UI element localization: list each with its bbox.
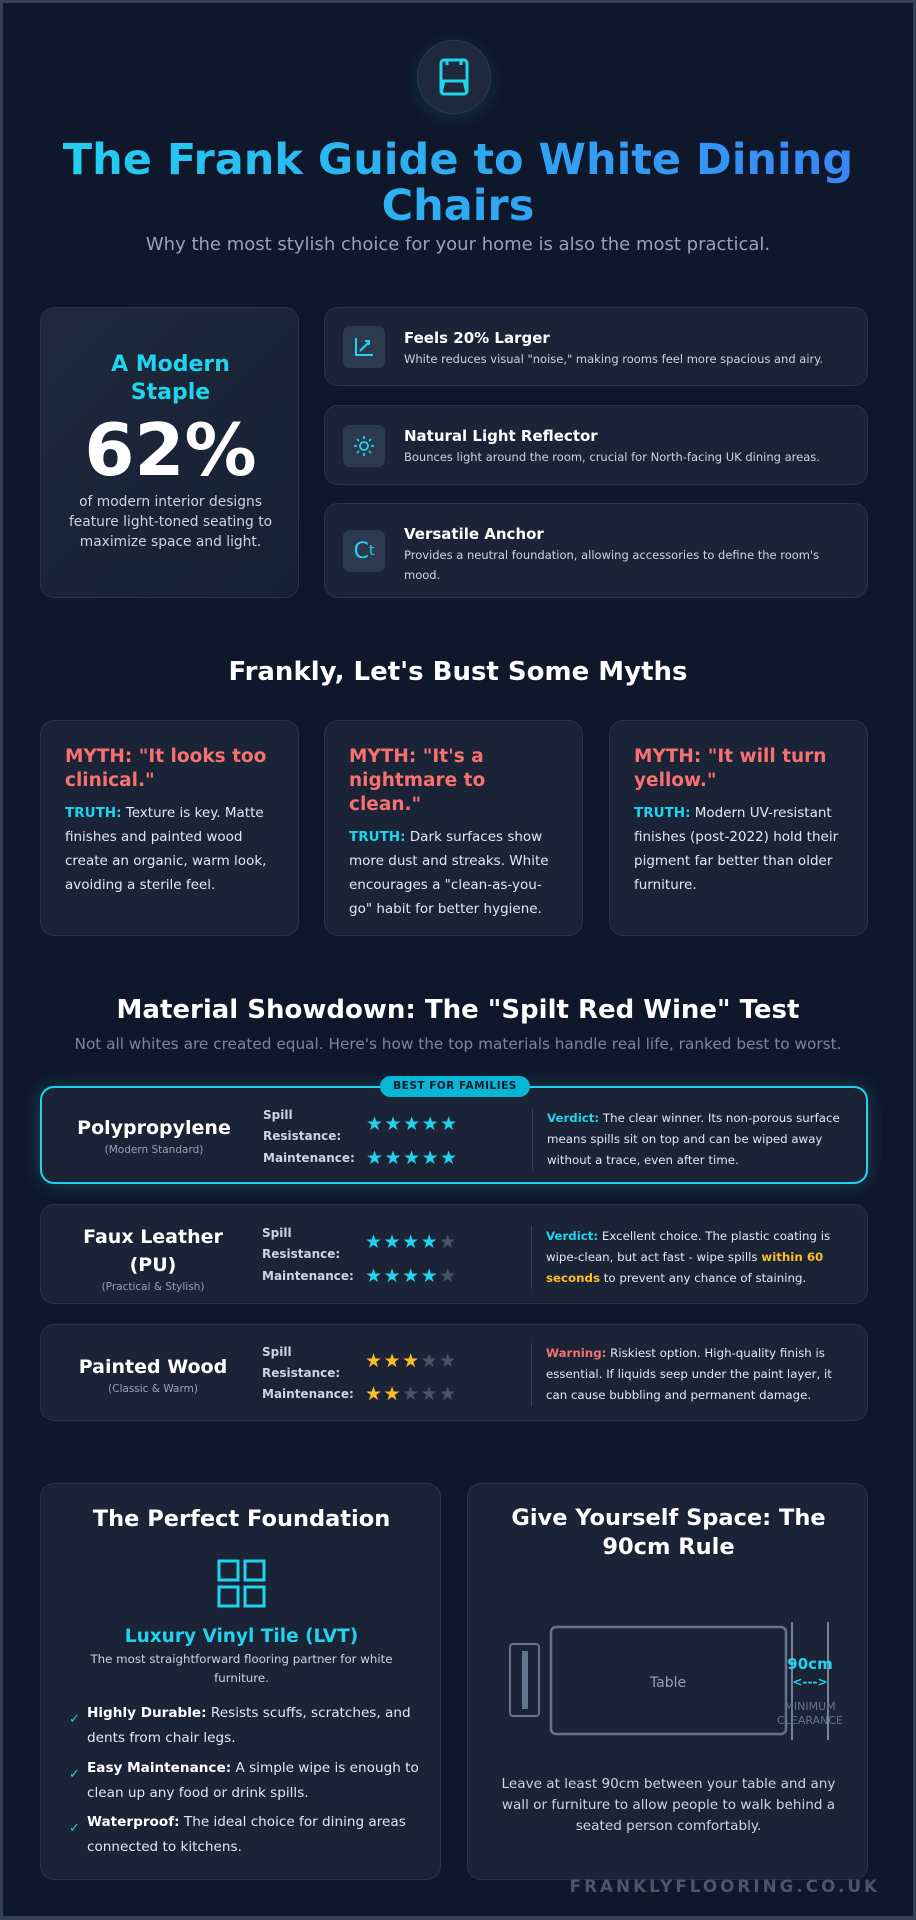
- panel: feels larger: [324, 307, 868, 386]
- heading: Give Yourself Space: The 90cm Rule: [511, 1505, 826, 1560]
- diagram: Table: [649, 1675, 686, 1691]
- stat heading: A Modern: [111, 352, 230, 377]
- subtitle: Why the most stylish choice for your home is also the most practical.: [146, 234, 770, 255]
- panel: polypropylene: Resistance:: [263, 1129, 341, 1143]
- panel: perfect foundation: Easy Maintenance: A simple wipe is enough to clean up any food or drink spills.: [87, 1760, 419, 1801]
- panel: painted wood: (Classic & Warm): [108, 1383, 198, 1395]
- panel: myth clean: TRUTH: Dark surfaces show more dust and streaks. White encourages a "clean-as-you-go" habit for better hygiene.: [349, 829, 549, 917]
- panel: faux leather: Maintenance:: [262, 1269, 354, 1283]
- icon: sun: [343, 425, 385, 467]
- panel: faux leather: Faux Leather: [83, 1226, 223, 1248]
- list: Highly Durable: Resists scuffs, scratches, and dents from chair legs.: [87, 1705, 411, 1746]
- panel: light reflector: Bounces light around the room, crucial for North-facing UK dining areas.: [404, 450, 820, 464]
- panel: feels larger: Feels 20% Larger: [404, 329, 550, 347]
- panel: perfect foundation: ✓: [69, 1712, 80, 1727]
- diagram: [509, 1622, 843, 1740]
- heading: material showdown: Material Showdown: The "Spilt Red Wine" Test: [117, 995, 799, 1025]
- title: [20, 137, 896, 229]
- warning: Warning: Riskiest option. High-quality finish is essential. If liquids seep under the paint layer, it can cause bubbling and permanent damage.: [546, 1346, 832, 1402]
- panel: faux leather: (PU): [130, 1254, 176, 1276]
- heading: The Perfect Foundation: [93, 1506, 390, 1532]
- panel: polypropylene: Maintenance:: [263, 1151, 355, 1165]
- title: The Frank Guide to White Dining: [63, 135, 853, 185]
- panel: faux leather: (Practical & Stylish): [102, 1281, 204, 1293]
- diagram: <--->: [792, 1675, 828, 1689]
- panel: polypropylene: (Modern Standard): [105, 1144, 203, 1156]
- badge: BEST FOR FAMILIES: [393, 1080, 517, 1092]
- stat heading: [111, 352, 230, 405]
- footer brand: FRANKLYFLOORING.CO.UK: [570, 1876, 880, 1896]
- panel: polypropylene: Spill: [263, 1108, 293, 1122]
- icon: tiles: [218, 1560, 266, 1608]
- diagram: 90cm: [787, 1655, 833, 1673]
- panel: 90cm rule: [467, 1483, 868, 1880]
- subheading: Not all whites are created equal. Here's how the top materials handle real life, ranked best to worst.: [74, 1035, 842, 1053]
- panel: faux leather: [40, 1204, 868, 1304]
- panel: stat 62%: [40, 307, 299, 598]
- verdict: Verdict: The clear winner. Its non-porous surface means spills sit on top and can be wiped away without a trace, even after time.: [547, 1111, 840, 1167]
- panel: perfect foundation: ✓: [69, 1821, 80, 1836]
- stat heading: Staple: [131, 380, 210, 405]
- panel: faux leather: ★★★★★: [365, 1265, 458, 1287]
- panel: painted wood: Maintenance:: [262, 1387, 354, 1401]
- panel: versatile anchor: Provides a neutral foundation, allowing accessories to define the room's mood.: [404, 548, 819, 582]
- panel: myth clinical: TRUTH: Texture is key. Matte finishes and painted wood create an organic, warm look, avoiding a sterile feel.: [65, 805, 266, 893]
- panel: faux leather: ★★★★★: [365, 1231, 458, 1253]
- panel: myth clean: MYTH: "It's a nightmare to clean.": [349, 746, 485, 815]
- panel: myth clean: [324, 720, 583, 936]
- panel: polypropylene: [40, 1086, 868, 1184]
- panel: perfect foundation: The most straightforward flooring partner for white furniture.: [90, 1652, 393, 1685]
- panel: perfect foundation: [40, 1483, 441, 1880]
- panel: light reflector: [324, 405, 868, 485]
- panel: light reflector: Natural Light Reflector: [404, 427, 598, 445]
- panel: polypropylene: ★★★★★: [366, 1147, 459, 1169]
- panel: polypropylene: Polypropylene: [77, 1117, 231, 1139]
- panel: versatile anchor: Versatile Anchor: [404, 525, 544, 543]
- panel: polypropylene: ★★★★★: [366, 1113, 459, 1135]
- icon: anchor: C: [354, 538, 369, 564]
- panel: painted wood: Spill: [262, 1345, 292, 1359]
- title: Chairs: [382, 181, 534, 231]
- icon: anchor: [343, 530, 385, 572]
- panel: painted wood: Painted Wood: [79, 1356, 227, 1378]
- heading: myths: Frankly, Let's Bust Some Myths: [228, 657, 688, 687]
- panel: myth yellow: [609, 720, 868, 936]
- stat description: of modern interior designs feature light-toned seating to maximize space and light.: [69, 494, 272, 550]
- diagram: CLEARANCE: [777, 1714, 843, 1727]
- panel: painted wood: ★★★★★: [365, 1383, 458, 1405]
- panel: myth yellow: MYTH: "It will turn yellow.": [634, 746, 826, 791]
- panel: perfect foundation: ✓: [69, 1767, 80, 1782]
- badge: [380, 1076, 530, 1097]
- panel: perfect foundation: Waterproof: The ideal choice for dining areas connected to kitchens.: [87, 1814, 406, 1855]
- panel: myth yellow: TRUTH: Modern UV-resistant finishes (post-2022) hold their pigment far better than older furniture.: [634, 805, 838, 893]
- icon: chair logo: [417, 40, 491, 114]
- LVT title: Luxury Vinyl Tile (LVT): [125, 1626, 358, 1647]
- panel: faux leather: Resistance:: [262, 1247, 340, 1261]
- panel: painted wood: Resistance:: [262, 1366, 340, 1380]
- icon: anchor: t: [369, 543, 374, 559]
- panel: painted wood: ★★★★★: [365, 1350, 458, 1372]
- panel: feels larger: White reduces visual "noise," making rooms feel more spacious and airy.: [404, 352, 823, 366]
- panel: faux leather: Spill: [262, 1226, 292, 1240]
- description: Leave at least 90cm between your table and any wall or furniture to allow people to walk behind a seated person comfortably.: [502, 1776, 835, 1834]
- panel: painted wood: [40, 1324, 868, 1421]
- panel: myth clinical: MYTH: "It looks too clinical.": [65, 746, 266, 791]
- panel: myth clinical: [40, 720, 299, 936]
- diagram: MINIMUM: [784, 1700, 836, 1713]
- icon: chart: [343, 326, 385, 368]
- panel: versatile anchor: [324, 503, 868, 598]
- verdict: Verdict: Excellent choice. The plastic coating is wipe-clean, but act fast - wipe spills within 60 seconds to prevent any chance of staining.: [546, 1229, 830, 1285]
- stat number: 62%: [84, 408, 257, 492]
